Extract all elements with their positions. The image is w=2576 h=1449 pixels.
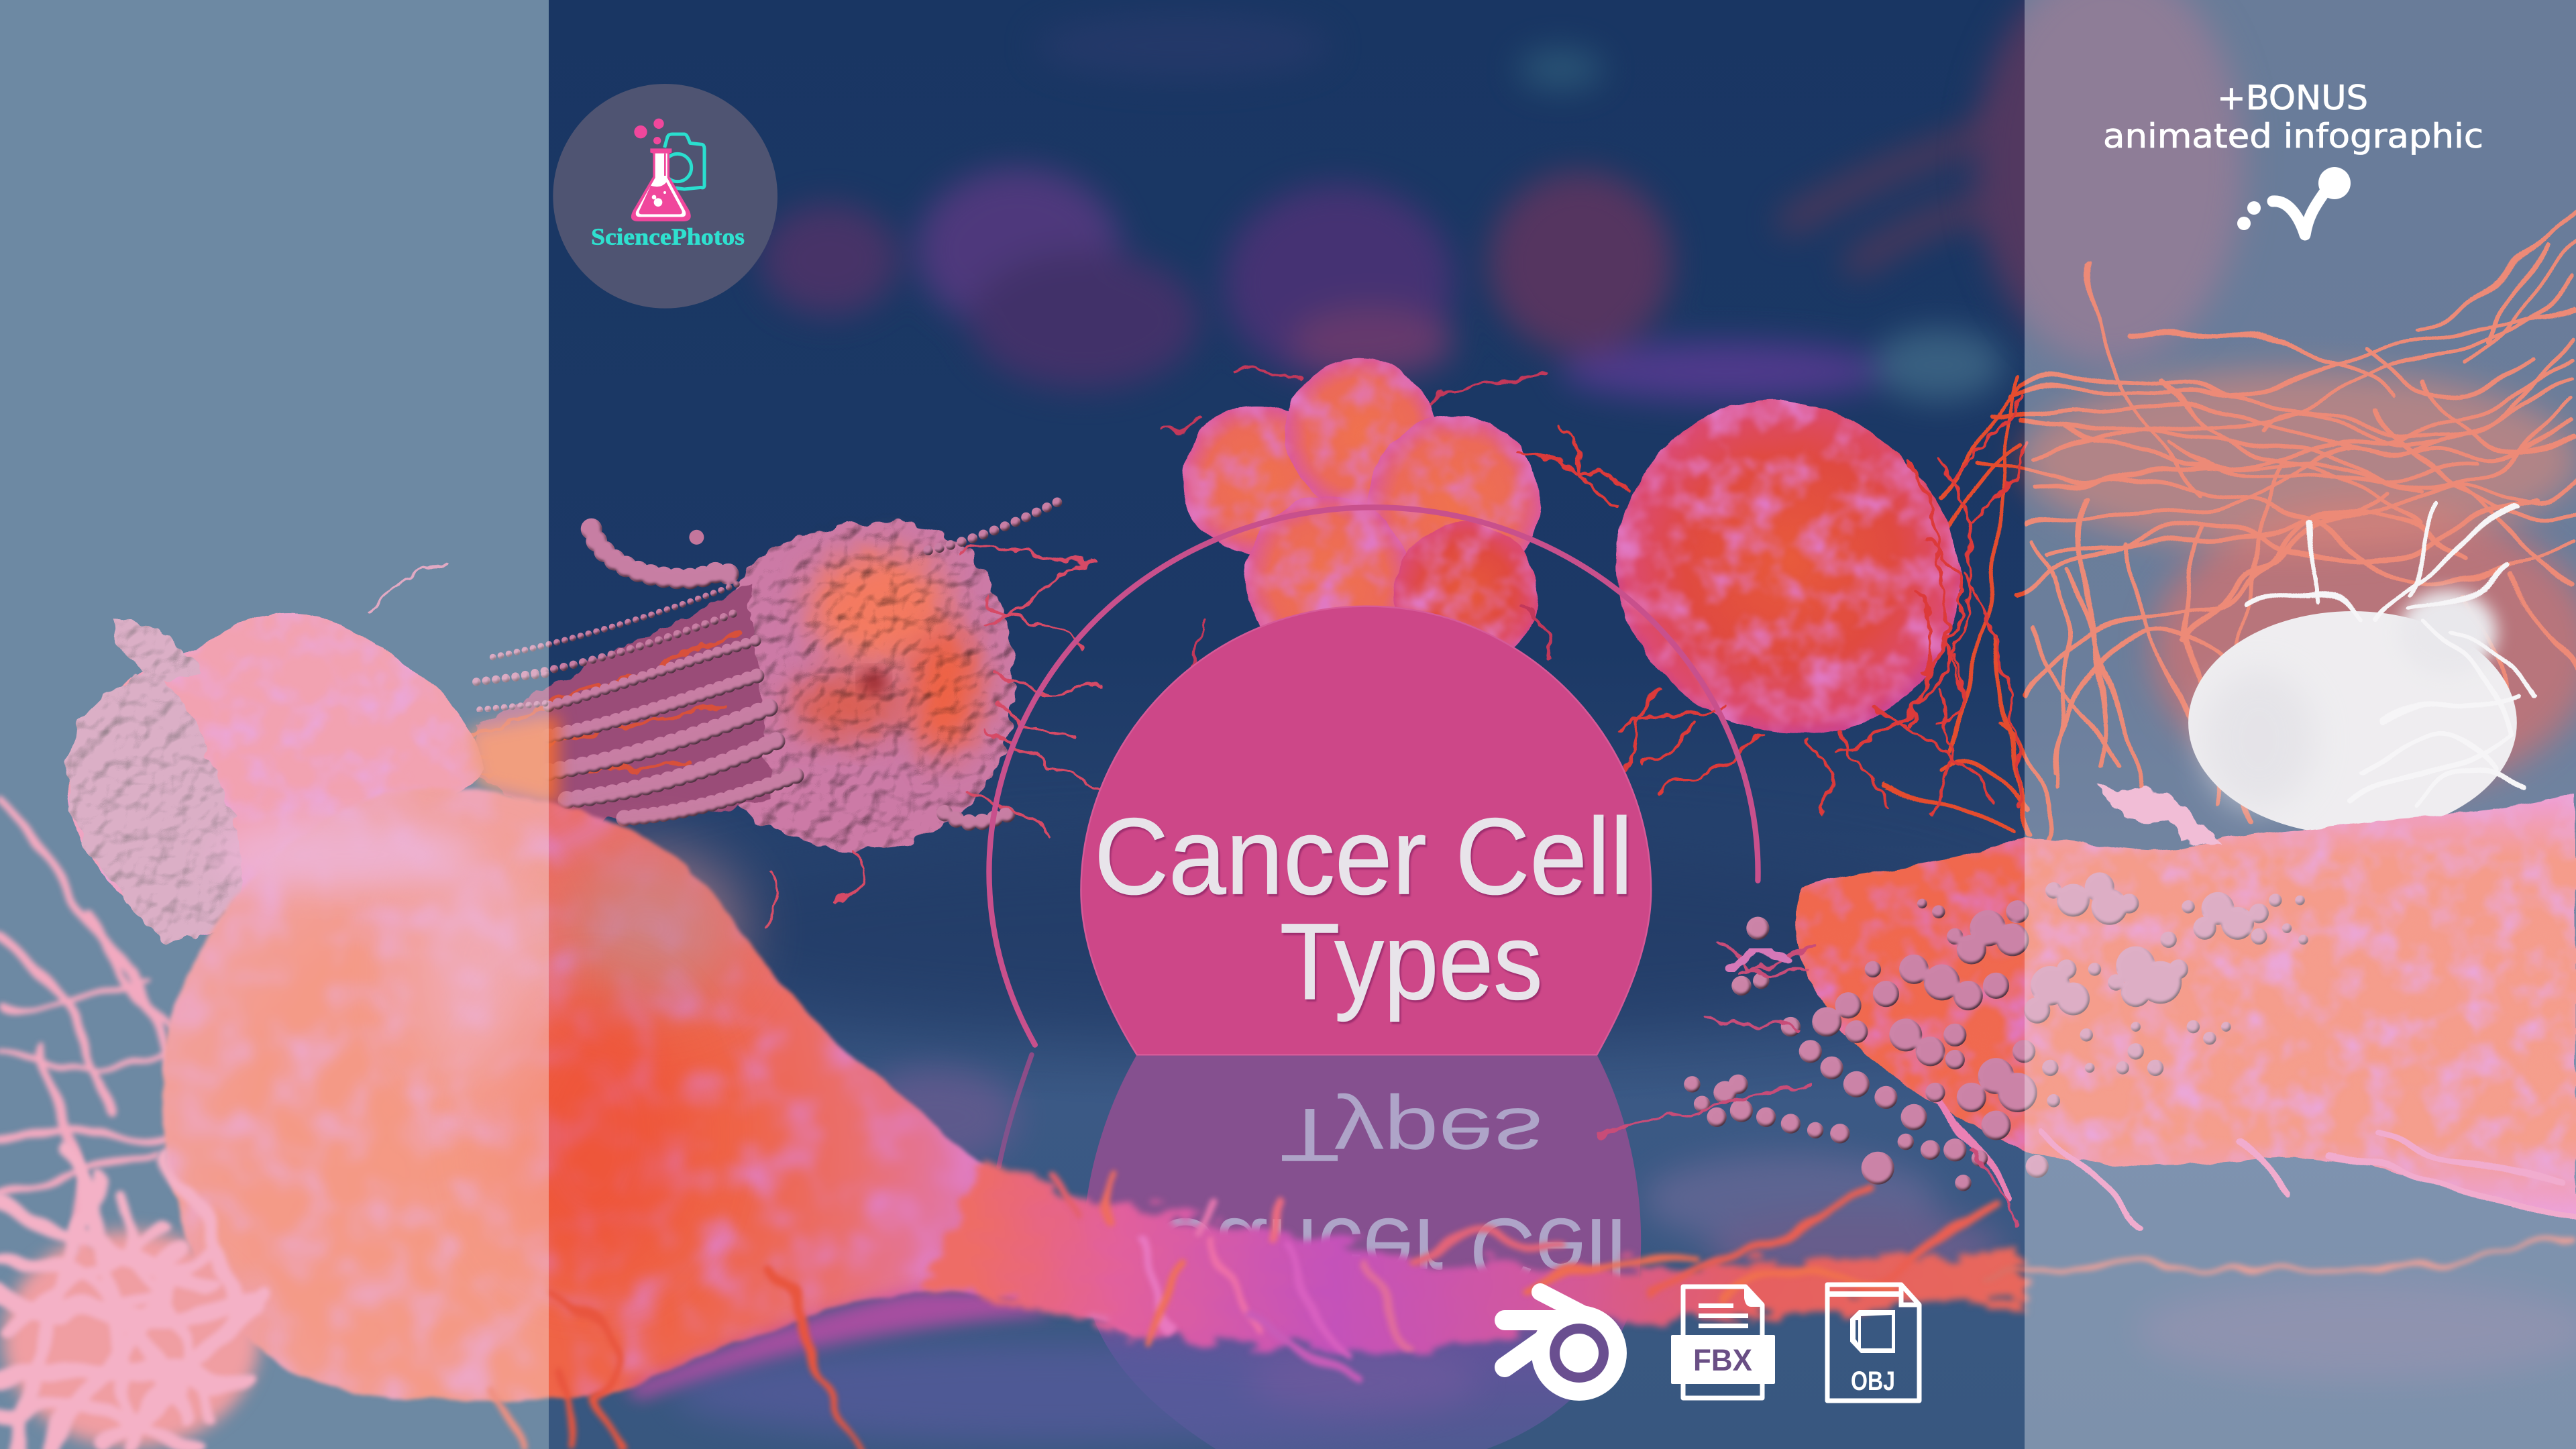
far sphere upper right (1975, 0, 2244, 365)
FBX label: FBX (1693, 1343, 1752, 1377)
icon: OBJ file (1827, 1285, 1919, 1401)
left backdrop tint (0, 0, 549, 1449)
right light side panel (2025, 0, 2576, 1449)
bottom right flat cell (1796, 786, 2576, 1224)
bonus line: +BONUS (2217, 78, 2368, 117)
cell cluster (1183, 358, 1540, 667)
title line: Cancer Cell: Cancer Cell (1094, 796, 1633, 917)
cell surface bubbles (1684, 872, 2308, 1191)
left textured cell (476, 501, 1101, 928)
floor reflections (854, 1068, 2576, 1380)
pink tangled filaments bottom left (0, 1150, 260, 1449)
foreground large cell (162, 788, 1134, 1401)
reflected title word: Types (1280, 1093, 1543, 1178)
tail of big cell (920, 1159, 2576, 1377)
OBJ label: OBJ (1851, 1366, 1895, 1396)
stream from left cell (480, 583, 772, 824)
thin arc (989, 507, 1758, 1045)
icon: camera (663, 134, 704, 189)
bead chains of left stream (476, 501, 1060, 822)
white healthy cell (2188, 502, 2530, 835)
logo text: SciencePhotos (591, 224, 745, 250)
badge circle (553, 84, 777, 309)
title disc reflection (1083, 1055, 1641, 1449)
icon: animated mark (2237, 167, 2351, 235)
pale left cell (68, 559, 559, 945)
strands around cluster (1163, 366, 1552, 690)
dark floor under cells (625, 838, 2004, 1035)
title (1094, 796, 1633, 1022)
icon: FBX file (1671, 1287, 1775, 1398)
reflected title phrase: Cancer Cell (1150, 1199, 1626, 1305)
pink stalk near flat cell (1728, 951, 1787, 969)
far red ribbons (1790, 123, 2024, 263)
icon: flask (631, 119, 691, 221)
orange foreground filaments (493, 1265, 863, 1449)
title line: Types: Types (1280, 902, 1543, 1022)
lower purple smear (674, 1344, 1479, 1442)
animated infographic line: animated infographic (2103, 117, 2483, 156)
red strand net upper right (1889, 213, 2576, 838)
far blurred cells (761, 13, 2004, 401)
branching strands by flat cell (1602, 945, 2021, 1224)
logo badge (553, 84, 777, 309)
arc reflection (999, 1055, 1032, 1167)
left light side panel (0, 0, 549, 1449)
icon: blender (1505, 1292, 1627, 1401)
foreground strands behind big cell (0, 805, 172, 1265)
title disc (1081, 606, 1651, 1055)
bonus note (2103, 78, 2483, 156)
large right cell (1519, 394, 2024, 813)
